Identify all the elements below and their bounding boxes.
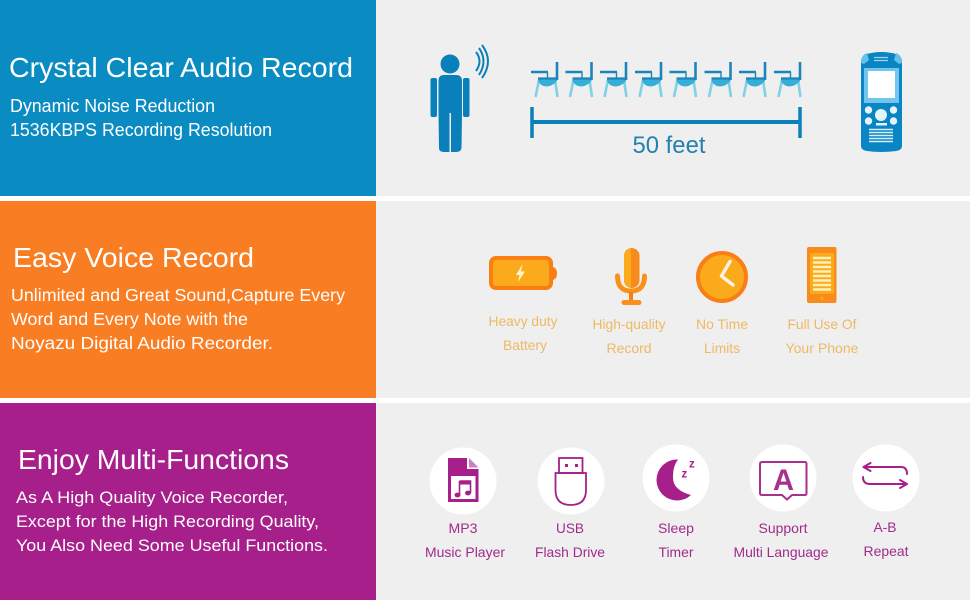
icon: microphone [618,248,644,305]
label: a-b repeat [864,519,909,559]
panel: easy voice record [0,201,376,398]
label: sleep timer: Sleep [658,520,694,536]
feature: high-quality record [592,248,666,356]
icon: phone [807,247,836,303]
text block: easy voice details: Word and Every Note with the [11,309,248,329]
heading: crystal clear audio: Crystal Clear Audio Record [9,52,353,83]
icon: mp3 file [430,448,496,514]
text block: multi-functions details: As A High Quality Voice Recorder, [16,488,288,507]
label: mp3 music player: MP3 [448,520,478,536]
label: 50 feet: 50 feet [632,132,706,159]
panel: enjoy multi-functions [0,403,376,600]
feature: no time limits [696,253,748,356]
label: a-b repeat: Repeat [864,543,909,559]
feature: usb flash drive [535,448,605,560]
feature: heavy duty battery [488,258,558,353]
icon: language bubble: A [773,464,794,497]
feature: sleep timer [642,444,710,560]
label: support multi language: Multi Language [734,544,829,560]
feature: full use of your phone [786,247,859,356]
label: full use of your phone: Your Phone [786,340,859,356]
label: a-b repeat: A-B [874,519,896,535]
text block: multi-functions details [16,488,328,555]
panel: crystal clear audio [0,0,376,196]
label: no time limits: No Time [696,316,748,332]
label: sleep timer [658,520,694,560]
icon: moon: z [682,468,688,480]
feature: a-b repeat [852,444,920,559]
icon: battery [491,258,557,288]
feature: support multi language [734,444,829,560]
label: full use of your phone [786,316,859,356]
label: no time limits [696,316,748,356]
label: high-quality record: High-quality [592,316,666,332]
label: high-quality record [592,316,666,356]
label: high-quality record: Record [606,340,652,356]
label: no time limits: Limits [704,340,740,356]
text block: crystal clear details: 1536KBPS Recording Resolution [10,120,272,140]
label: support multi language [734,520,829,560]
label: usb flash drive [535,520,605,560]
feature: mp3 music player [425,448,505,560]
icon: moon: z [689,458,695,470]
icon: repeat arrows [852,444,920,512]
icon: moon [642,444,710,512]
label: full use of your phone: Full Use Of [788,316,857,332]
label: mp3 music player [425,520,505,560]
icon: usb drive [538,448,604,514]
icon: voice recorder [861,52,902,152]
label: heavy duty battery: Heavy duty [488,313,558,329]
icon: person speaking [430,45,488,152]
label: sleep timer: Timer [658,544,694,560]
label: mp3 music player: Music Player [425,544,505,560]
text block: multi-functions details: You Also Need Some Useful Functions. [16,536,328,555]
text block: crystal clear details: Dynamic Noise Reduction [10,96,215,116]
label: support multi language: Support [758,520,808,536]
label: usb flash drive: USB [556,520,584,536]
icon: row of chairs [531,62,800,97]
panel backgrounds [376,0,970,600]
label: heavy duty battery: Battery [503,337,547,353]
label: heavy duty battery [488,313,558,353]
icon: clock [698,253,746,301]
text block: easy voice details: Noyazu Digital Audio Recorder. [11,333,273,353]
text block: crystal clear details [10,96,272,140]
label: usb flash drive: Flash Drive [535,544,605,560]
text block: easy voice details: Unlimited and Great Sound,Capture Every [11,285,345,305]
heading: enjoy multi-functions: Enjoy Multi-Functions [18,444,289,475]
text block: easy voice details [11,285,345,353]
distance marker: 50 feet [532,107,800,159]
text block: multi-functions details: Except for the High Recording Quality, [16,512,319,531]
heading: easy voice record: Easy Voice Record [13,242,254,273]
